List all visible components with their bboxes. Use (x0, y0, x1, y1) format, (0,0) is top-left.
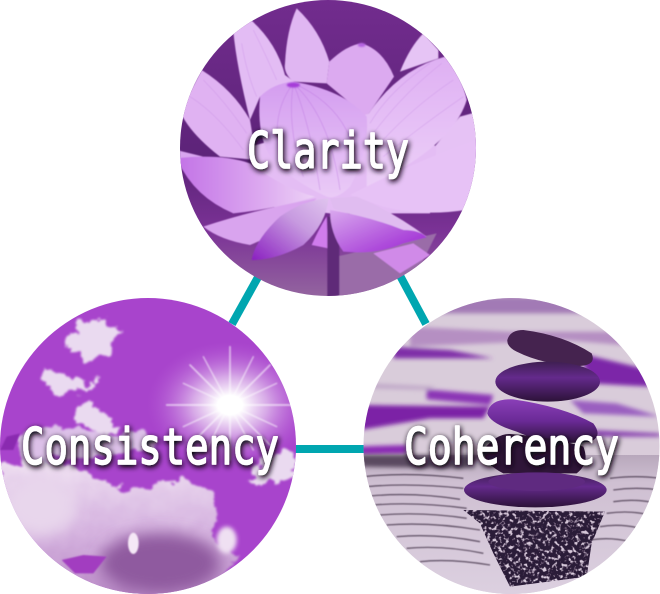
connector lines (232, 270, 426, 449)
panel: Coherency stones circle (350, 297, 660, 594)
heading: Clarity: Clarity (247, 122, 409, 180)
panel: Consistency sky circle (0, 297, 313, 594)
ripples (363, 475, 660, 565)
heading: Consistency: Consistency (21, 418, 279, 476)
water and stacked stones (350, 297, 660, 594)
sky with clouds and sun (0, 318, 313, 594)
stones (507, 330, 593, 366)
clouds (0, 318, 300, 594)
flower body backing (250, 113, 437, 213)
reflection (463, 510, 605, 587)
panel: Clarity lotus circle (177, 0, 480, 300)
lotus flower (177, 8, 480, 300)
